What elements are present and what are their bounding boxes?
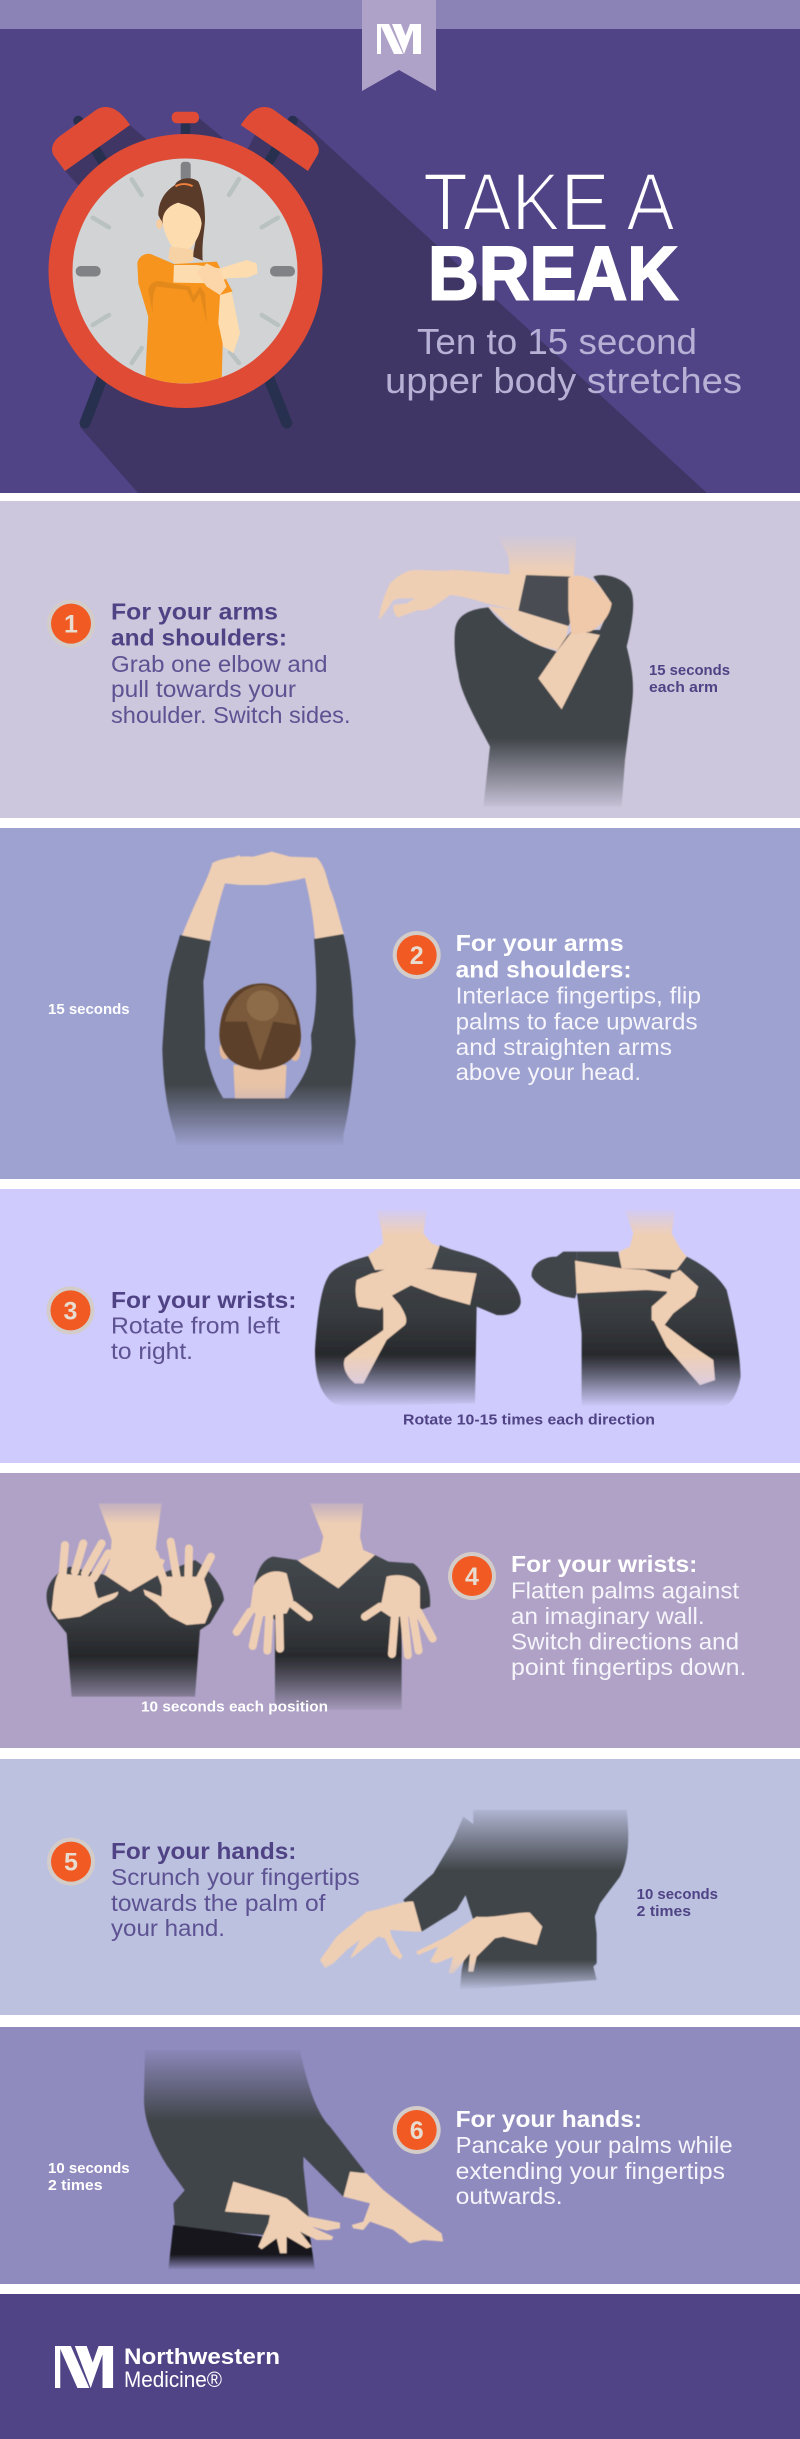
badge 3: 3 — [64, 1297, 77, 1325]
panel 2: arms and shoulders — [0, 828, 800, 1179]
panel 1: arms and shoulders — [0, 501, 800, 818]
badge 6: 6 — [410, 2117, 424, 2145]
duration 2: 15 seconds — [48, 1002, 130, 1018]
heading and instructions 3: Rotate from left — [111, 1313, 281, 1339]
duration 5: 2 times — [637, 1904, 691, 1920]
heading and instructions 2 — [456, 930, 701, 1085]
heading and instructions 4 — [511, 1551, 746, 1680]
title: BREAK — [428, 231, 678, 316]
heading and instructions 5 — [111, 1838, 360, 1941]
duration 5 — [637, 1887, 718, 1920]
heading and instructions 3 — [111, 1287, 296, 1364]
heading and instructions 6 — [456, 2106, 733, 2209]
heading and instructions 2: Interlace fingertips, flip — [456, 983, 701, 1009]
long clock shadow — [65, 118, 707, 493]
badge 1 — [47, 600, 95, 648]
photo: overhead stretch — [162, 852, 356, 1145]
duration 3: Rotate 10-15 times each direction — [403, 1412, 655, 1428]
subtitle: upper body stretches — [385, 360, 742, 401]
duration 1: each arm — [649, 680, 718, 696]
title — [423, 157, 678, 316]
heading and instructions 2: For your arms — [456, 930, 624, 956]
badge 5: 5 — [64, 1849, 78, 1877]
heading and instructions 6: For your hands: — [456, 2106, 642, 2132]
footer — [0, 2294, 800, 2439]
heading and instructions 1: and shoulders: — [111, 624, 287, 650]
panel 5: hands — [0, 1759, 800, 2015]
top band — [0, 0, 800, 29]
heading and instructions 6: Pancake your palms while — [456, 2132, 733, 2158]
heading and instructions 6: extending your fingertips — [456, 2158, 725, 2184]
duration 6: 10 seconds — [48, 2161, 130, 2177]
badge 2: 2 — [410, 942, 424, 970]
panel 3: wrists — [0, 1189, 800, 1463]
photo: wrist rotation, two poses — [315, 1210, 741, 1407]
icon: Northwestern Medicine logo — [55, 2346, 113, 2388]
badge 6 — [393, 2106, 441, 2154]
heading and instructions 2: and shoulders: — [456, 957, 632, 983]
photo: palms against wall, two poses — [47, 1503, 433, 1710]
badge 5 — [47, 1838, 95, 1886]
ribbon with logo — [362, 0, 436, 91]
subtitle — [385, 321, 742, 401]
badge 4 — [448, 1552, 496, 1600]
heading and instructions 6: outwards. — [456, 2183, 563, 2209]
heading and instructions 5: your hand. — [111, 1915, 225, 1941]
heading and instructions 4: Switch directions and — [511, 1629, 739, 1655]
heading and instructions 1: Grab one elbow and — [111, 651, 328, 677]
panel 6: hands — [0, 2027, 800, 2284]
duration 6 — [48, 2161, 130, 2194]
badge 3 — [46, 1286, 94, 1334]
heading and instructions 5: towards the palm of — [111, 1890, 326, 1916]
badge 4: 4 — [465, 1563, 479, 1591]
heading and instructions 3: For your wrists: — [111, 1287, 296, 1313]
heading and instructions 3: to right. — [111, 1338, 193, 1364]
duration 6: 2 times — [48, 2178, 102, 2194]
photo: scrunch fingertips — [320, 1810, 628, 1990]
badge 2 — [393, 931, 441, 979]
panel 4: wrists — [0, 1473, 800, 1748]
heading and instructions 4: For your wrists: — [511, 1551, 697, 1577]
heading and instructions 1 — [111, 599, 350, 728]
heading and instructions 1: For your arms — [111, 599, 278, 625]
duration 1 — [649, 663, 730, 696]
heading and instructions 1: pull towards your — [111, 676, 296, 702]
badge 1: 1 — [64, 611, 78, 639]
duration 4: 10 seconds each position — [141, 1700, 328, 1716]
heading and instructions 4: an imaginary wall. — [511, 1603, 705, 1629]
heading and instructions 4: Flatten palms against — [511, 1578, 740, 1604]
heading and instructions 2: palms to face upwards — [456, 1008, 698, 1034]
heading and instructions 1: shoulder. Switch sides. — [111, 702, 350, 728]
logo wordmark — [124, 2344, 280, 2392]
photo: elbow pull stretch — [379, 537, 633, 807]
header panel — [0, 0, 800, 493]
icon: alarm clock with stretching woman — [48, 107, 322, 423]
duration 1: 15 seconds — [649, 663, 730, 679]
title: TAKE A — [423, 157, 676, 248]
subtitle: Ten to 15 second — [417, 321, 697, 362]
heading and instructions 2: and straighten arms — [456, 1034, 672, 1060]
heading and instructions 5: Scrunch your fingertips — [111, 1864, 360, 1890]
duration 5: 10 seconds — [637, 1887, 718, 1903]
heading and instructions 2: above your head. — [456, 1059, 641, 1085]
logo wordmark: Northwestern — [124, 2344, 280, 2369]
heading and instructions 4: point fingertips down. — [511, 1654, 746, 1680]
heading and instructions 5: For your hands: — [111, 1838, 296, 1864]
logo wordmark: Medicine® — [124, 2367, 222, 2392]
photo: pancake palms — [144, 2050, 443, 2270]
